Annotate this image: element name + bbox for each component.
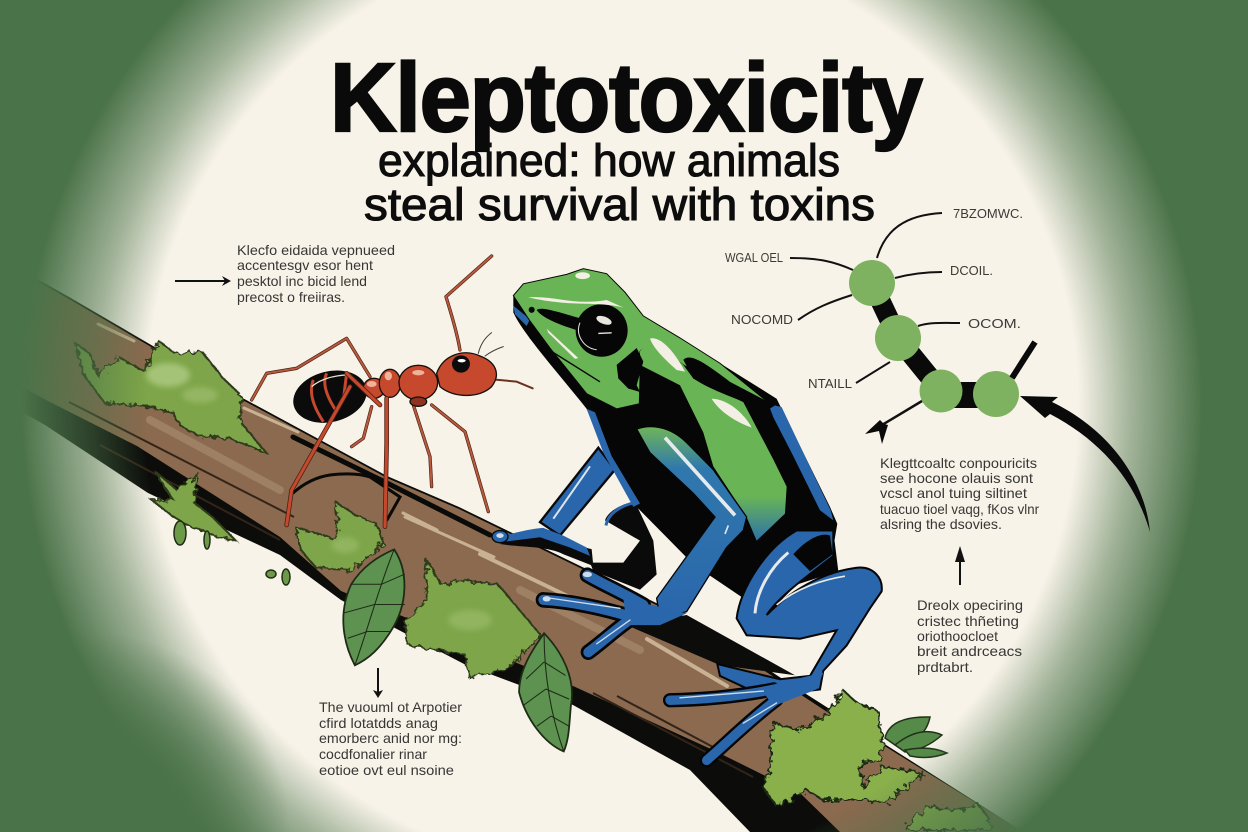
callout: bottom text: cocdfonalier rinar: [319, 746, 427, 762]
callout: ant text: accentesgv esor hent: [237, 257, 373, 273]
branch shadow: [627, 615, 795, 675]
molecule lower arrow: [865, 401, 922, 444]
moss droplets: [174, 521, 290, 585]
moss clumps lower right: [763, 690, 990, 830]
callout: compounds text: tuacuo tioel vaqg, fKos vlnr: [880, 501, 1039, 517]
hind leg: [717, 531, 882, 696]
callout: ant text: precost o freiiras.: [237, 289, 345, 305]
arrow: to ant text: [175, 276, 231, 286]
callout: predators text: Dreolx opeciring: [917, 597, 1023, 613]
molecule labels: WGAL OEL: [725, 250, 783, 265]
callout: predators text: prdtabrt.: [917, 659, 973, 675]
molecule labels: 7BZOMWC.: [953, 206, 1023, 221]
far front arm: [492, 448, 615, 566]
callout: predators text: breit andrceacs: [917, 643, 1022, 659]
branch shading: [293, 437, 880, 745]
black back stripe: [683, 358, 775, 411]
arrow: up: [955, 546, 965, 585]
branch grain: [69, 402, 753, 777]
frog eye: [576, 304, 628, 357]
molecule labels: NOCOMD: [731, 312, 793, 327]
ant legs: [252, 256, 533, 512]
callout: predators text: cristec thñeting: [917, 613, 1019, 629]
molecule atoms: [849, 260, 1019, 417]
poison dart frog: [492, 269, 882, 760]
callout: predators text: oriothoocloet: [917, 628, 998, 644]
ant head: [367, 353, 496, 395]
body silhouette: [513, 269, 837, 598]
near front arm: [637, 427, 747, 618]
callout: compounds text: vcscl anol tuing siltinet: [880, 485, 1027, 501]
callout: predators text: [917, 597, 1023, 675]
blue body edges: [513, 306, 833, 520]
callout: compounds text: [880, 455, 1039, 532]
molecule connector lines: [790, 213, 960, 383]
leaves small lower right: [885, 717, 947, 757]
subtitle: [364, 135, 875, 230]
green flank: [640, 338, 787, 541]
molecule labels: DCOIL.: [950, 263, 993, 278]
hind foot: [670, 672, 823, 760]
ant near legs: [287, 373, 387, 527]
callout: compounds text: Klegttcoaltc conpouricits: [880, 455, 1037, 471]
callout: ant text: Klecfo eidaida vepnueed: [237, 242, 395, 258]
eye stripe: [537, 309, 583, 331]
molecule labels: [725, 206, 1023, 391]
arrow: down: [373, 668, 383, 698]
red ant: [252, 256, 533, 527]
callout: compounds text: see hocone olauis sont: [880, 470, 1033, 486]
leaf right: [519, 633, 572, 752]
subtitle: explained: how animals: [378, 135, 840, 186]
molecule labels: NTAILL: [808, 376, 852, 391]
title: Kleptotoxicity: [330, 44, 923, 153]
ant abdomen: [288, 363, 372, 430]
callout: ant text: [237, 242, 395, 305]
callout: bottom text: emorberc anid nor mg:: [319, 730, 462, 746]
ant thorax: [363, 365, 438, 406]
callout: bottom text: cfird lotatdds anag: [319, 715, 438, 731]
green head and back: [513, 269, 770, 409]
black under eye: [617, 348, 643, 392]
leaf left: [343, 549, 405, 665]
callout: bottom text: [319, 699, 462, 778]
callout: ant text: pesktol inc bicid lend: [237, 273, 367, 289]
molecule tail: [1012, 342, 1035, 378]
subtitle: steal survival with toxins: [364, 179, 875, 230]
curved arrow: [1020, 396, 1150, 532]
moss highlights: [146, 363, 853, 755]
molecule diagram: [790, 213, 1150, 532]
branch streaks: [98, 324, 727, 686]
callout: bottom text: eotioe ovt eul nsoine: [319, 762, 454, 778]
near front foot: [543, 572, 687, 652]
molecule labels: OCOM.: [968, 316, 1021, 331]
moss clumps: [75, 341, 541, 677]
callout: bottom text: The vuouml ot Arpotier: [319, 699, 462, 715]
branch: [0, 258, 1023, 832]
far hind leg: [590, 502, 657, 590]
frog highlights: [528, 272, 752, 427]
callout: compounds text: alsring the dsovies.: [880, 516, 1002, 532]
